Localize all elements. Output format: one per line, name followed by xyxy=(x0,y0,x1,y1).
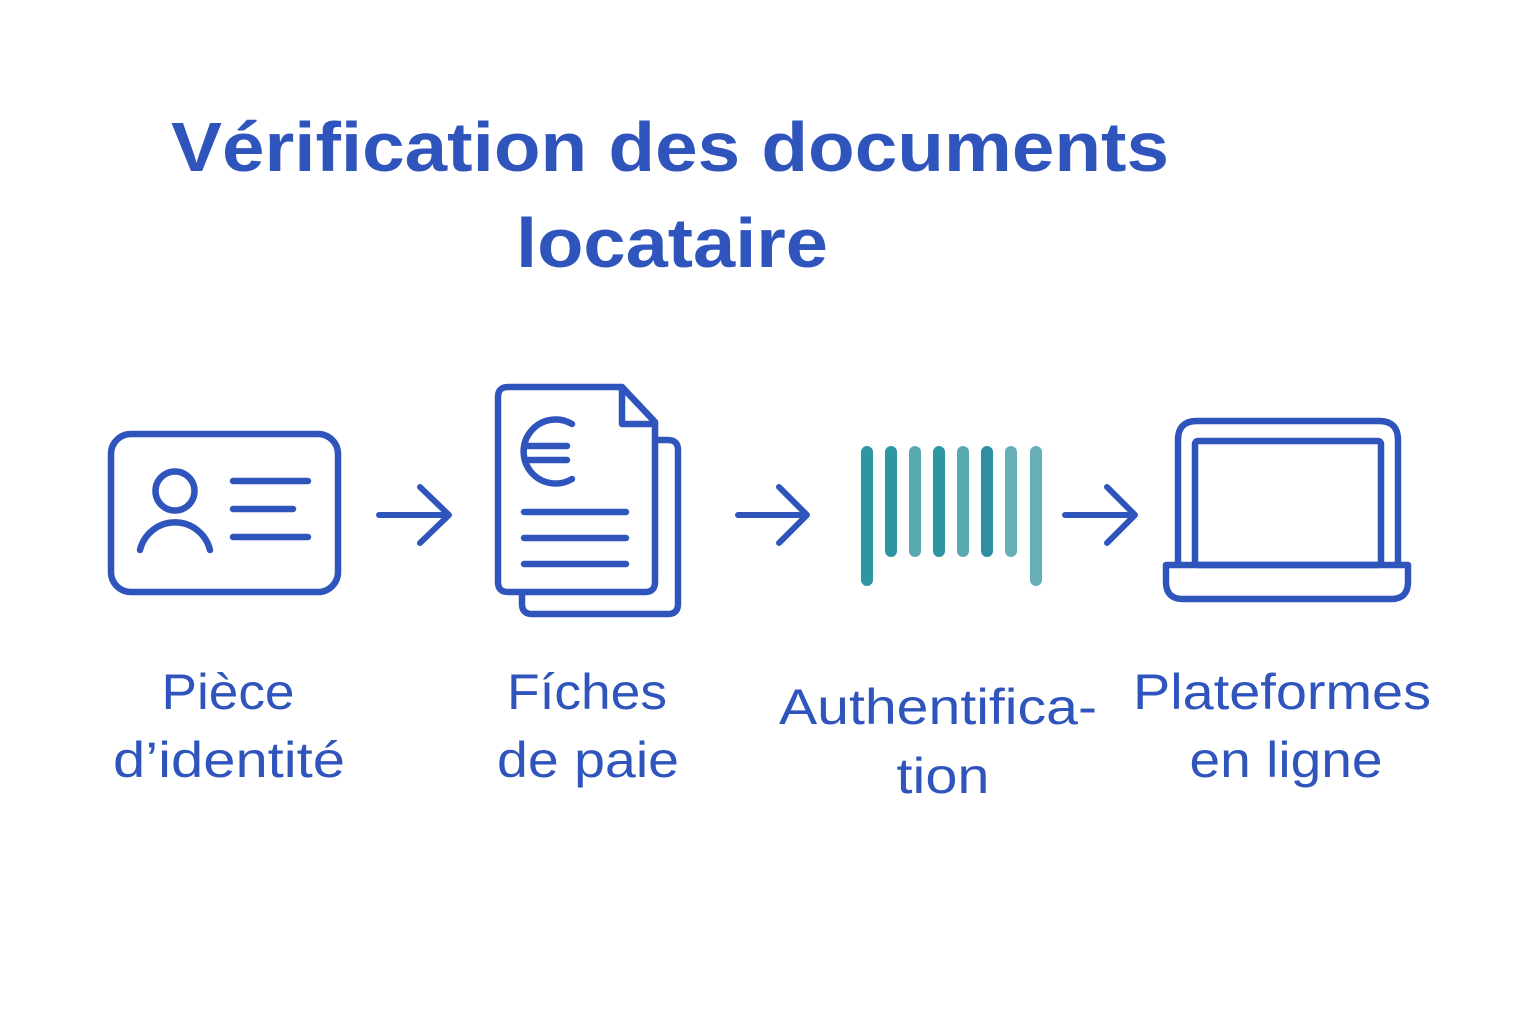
arrow 3 xyxy=(1065,487,1135,543)
arrow 2 xyxy=(738,487,807,543)
label: Pièce d'identité xyxy=(113,664,345,788)
label: Plateformes en ligne: Plateformes xyxy=(1133,664,1431,720)
label: Fiches de paie: de paie xyxy=(497,732,679,788)
label: Plateformes en ligne: en ligne xyxy=(1190,732,1382,788)
title: Vérification des documents xyxy=(171,108,1169,186)
icon: laptop xyxy=(1166,421,1408,599)
label: Pièce d'identité: Pièce xyxy=(162,664,294,720)
label: Authentification: tion xyxy=(896,748,990,804)
icon: barcode xyxy=(867,452,1036,580)
icon: payslip documents xyxy=(498,387,678,614)
icon: ID card xyxy=(111,434,338,592)
arrow 1 xyxy=(379,487,449,543)
label: Authentification: Authentifica- xyxy=(779,679,1097,735)
label: Pièce d'identité: d’identité xyxy=(113,732,345,788)
title: locataire xyxy=(516,204,828,282)
label: Fiches de paie: Fíches xyxy=(507,664,667,720)
label: Authentification xyxy=(779,679,1097,804)
label: Plateformes en ligne xyxy=(1133,664,1431,788)
label: Fiches de paie xyxy=(497,664,679,788)
title xyxy=(171,108,1169,282)
